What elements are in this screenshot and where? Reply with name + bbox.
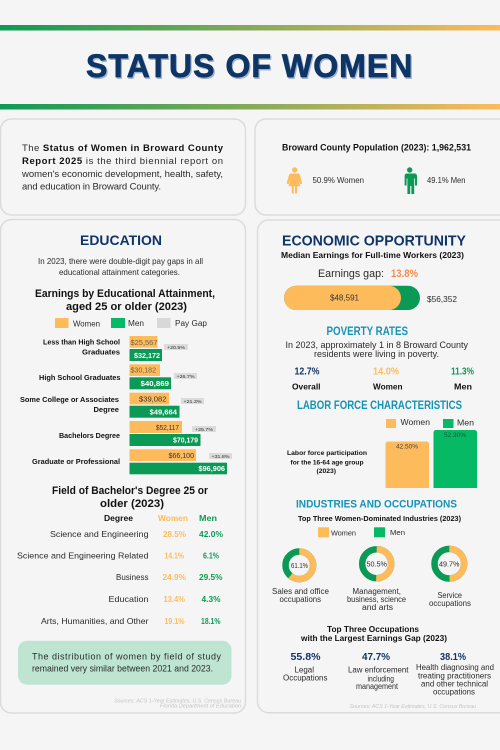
row: less than high school: Graduates xyxy=(82,348,120,356)
stat: law enforcement: 47.7% xyxy=(362,652,390,663)
donut chart: management: Management, xyxy=(352,587,401,596)
stat: health practitioners xyxy=(416,652,494,696)
poverty statistics: 11.3% xyxy=(451,366,474,378)
stat: law enforcement: management xyxy=(356,682,399,691)
table header xyxy=(104,513,217,523)
row: high school graduates: +26.7% xyxy=(176,374,194,379)
donut chart: service: occupations xyxy=(429,599,471,608)
intro text: and education in Broward County. xyxy=(22,182,161,192)
sources: education xyxy=(114,698,241,710)
donut chart: management xyxy=(347,549,407,612)
heading: field of degree: older (2023) xyxy=(100,498,164,510)
stat: legal occupations: Legal xyxy=(294,666,314,674)
subheading: women-dominated industries: Top Three Women-Dominated Industries (2023) xyxy=(298,514,461,523)
stat: health practitioners: 38.1% xyxy=(440,652,466,663)
legend: industries xyxy=(318,527,405,538)
sources: economic opportunity: Sources: ACS 1-Year Estimates, U.S. Census Bureau xyxy=(350,704,476,710)
earnings gap: 13.8% xyxy=(391,268,418,280)
row: graduate or professional xyxy=(32,449,232,474)
donut chart: service xyxy=(429,549,471,608)
table rows xyxy=(17,529,223,626)
row: some college or associates xyxy=(20,393,204,418)
poverty statistics: Women xyxy=(373,382,403,392)
legend: labor force xyxy=(386,418,474,428)
legend: earnings chart: Pay Gap xyxy=(175,319,208,328)
row: graduate or professional: Graduate or Professional xyxy=(32,457,120,466)
legend: industries: Women xyxy=(331,528,356,538)
heading: labor force: LABOR FORCE CHARACTERISTICS xyxy=(297,400,462,412)
intro text: women's economic development, health, safety, xyxy=(21,169,223,180)
row: some college or associates: $39,082 xyxy=(139,394,166,404)
icon: man figure xyxy=(405,167,417,194)
stat: law enforcement: including xyxy=(368,674,394,684)
bar chart: earnings by educational attainment xyxy=(20,336,232,474)
poverty text xyxy=(286,340,468,360)
table rows: 14.1% xyxy=(164,550,184,560)
poverty statistics: Men xyxy=(454,382,472,392)
earnings pill bar: $48,591 xyxy=(330,292,359,302)
title: STATUS OF WOMEN xyxy=(87,49,415,85)
table header: Men xyxy=(199,513,217,523)
table rows: Arts, Humanities, and Other xyxy=(41,616,149,626)
earnings pill bar: $56,352 xyxy=(427,294,457,304)
row: bachelors degree: +25.7% xyxy=(195,427,213,432)
panel: report introduction xyxy=(0,119,246,215)
education summary text xyxy=(38,256,203,277)
table: field of bachelor's degree xyxy=(17,513,223,626)
heading: education: EDUCATION xyxy=(80,232,162,248)
legend: earnings chart: Men xyxy=(128,319,144,328)
table rows: Science and Engineering Related xyxy=(17,550,149,560)
heading: industries and occupations: INDUSTRIES AND OCCUPATIONS xyxy=(296,498,457,510)
stat: health practitioners: Health diagnosing and xyxy=(416,663,494,672)
intro text xyxy=(21,143,224,192)
poverty text: In 2023, approximately 1 in 8 Broward County xyxy=(286,340,468,351)
poverty text: residents were living in poverty. xyxy=(314,349,439,360)
table rows: 24.9% xyxy=(162,572,186,582)
panel: economic opportunity xyxy=(258,220,500,713)
subheading: median earnings: Median Earnings for Full-time Workers (2023) xyxy=(281,250,464,260)
row: less than high school: +20.5% xyxy=(167,345,185,350)
stat: health practitioners: occupations xyxy=(433,688,475,696)
earnings gap: Earnings gap: xyxy=(318,268,384,280)
heading: field of degree xyxy=(52,485,209,510)
poverty statistics: 12.7% xyxy=(294,366,320,378)
legend: earnings chart: Women xyxy=(73,320,100,328)
row: high school graduates: High School Graduates xyxy=(39,373,120,382)
table rows: Science and Engineering xyxy=(50,529,149,539)
callout: distribution note: The distribution of women by field of study xyxy=(32,652,222,662)
row: high school graduates: $40,869 xyxy=(140,379,169,388)
heading: field of degree: Field of Bachelor's Degree 25 or xyxy=(52,485,209,497)
subheading: largest earnings gap: Top Three Occupations xyxy=(327,624,419,634)
education summary text: educational attainment categories. xyxy=(59,267,180,277)
heading: economic opportunity: ECONOMIC OPPORTUNITY xyxy=(282,234,466,250)
row: bachelors degree xyxy=(59,421,216,446)
heading: earnings by attainment: aged 25 or older (2023) xyxy=(66,301,187,313)
row: some college or associates: $49,664 xyxy=(150,408,178,416)
row: some college or associates: Some College or Associates xyxy=(20,395,119,404)
bar chart: labor force participation: 42.50% xyxy=(396,444,418,450)
row: less than high school: $32,172 xyxy=(134,351,160,360)
legend: labor force: Women xyxy=(400,418,430,427)
poverty statistics: 14.0% xyxy=(373,366,399,378)
intro text: Report 2025 is the third biennial report on xyxy=(22,156,223,167)
table rows: 18.1% xyxy=(201,616,221,626)
labor force label: Labor force participation xyxy=(287,450,367,457)
population heading: Broward County Population (2023): 1,962,531 xyxy=(282,142,472,154)
sources: education: Florida Department of Education xyxy=(160,704,241,710)
row: some college or associates: Degree xyxy=(94,405,119,414)
row: graduate or professional: $66,100 xyxy=(168,451,194,460)
title: STATUS OF WOMEN xyxy=(86,48,413,84)
women share: 50.9% Women xyxy=(312,176,364,185)
panel: county population xyxy=(255,119,500,215)
row: bachelors degree: $70,179 xyxy=(173,436,198,444)
icon: woman figure xyxy=(287,167,302,194)
row: less than high school xyxy=(43,336,188,361)
education summary text: In 2023, there were double-digit pay gaps in all xyxy=(38,256,203,266)
table rows: 29.5% xyxy=(199,572,223,582)
row: high school graduates: $30,182 xyxy=(130,366,156,374)
heading: earnings by attainment xyxy=(35,288,215,313)
row: high school graduates xyxy=(39,364,197,389)
legend: industries: Men xyxy=(390,528,405,537)
sources: education: Sources: ACS 1-Year Estimates, U.S. Census Bureau xyxy=(114,698,241,704)
row: some college or associates: +21.3% xyxy=(184,399,202,404)
bar chart: labor force participation: 52.30% xyxy=(444,432,466,439)
donut chart: service: 49.7% xyxy=(439,560,460,568)
donut chart: sales and office: 61.1% xyxy=(291,561,308,570)
donut chart: service: Service xyxy=(438,591,462,600)
labor force label: for the 16-64 age group xyxy=(290,460,364,466)
donut chart: sales and office xyxy=(272,552,330,604)
table header: Women xyxy=(158,513,188,523)
donut chart: management: 50.5% xyxy=(366,560,387,568)
donut chart: sales and office: occupations xyxy=(280,595,321,604)
table header: Degree xyxy=(104,513,133,523)
heading: earnings by attainment: Earnings by Educational Attainment, xyxy=(35,288,215,300)
legend: earnings chart xyxy=(55,318,208,328)
men share: 49.1% Men xyxy=(427,176,466,185)
donut chart: management: and arts xyxy=(362,603,393,612)
row: graduate or professional: +31.8% xyxy=(212,454,230,459)
poverty statistics: Overall xyxy=(292,382,320,392)
table rows: 42.0% xyxy=(199,529,223,539)
donut chart: management: business, science xyxy=(347,595,407,604)
stat: legal occupations: Occupations xyxy=(283,674,328,682)
stat: health practitioners: treating practitioners xyxy=(418,672,491,680)
stat: law enforcement xyxy=(348,652,409,691)
row: bachelors degree: Bachelors Degree xyxy=(59,431,120,440)
heading: poverty rates: POVERTY RATES xyxy=(326,326,408,338)
table rows: 4.3% xyxy=(202,594,221,604)
earnings gap xyxy=(318,268,418,280)
donut chart: sales and office: Sales and office xyxy=(272,587,330,596)
table rows: 28.5% xyxy=(163,529,186,539)
row: less than high school: Less than High School xyxy=(43,338,120,346)
stat: law enforcement: Law enforcement xyxy=(348,666,409,674)
subheading: largest earnings gap xyxy=(300,624,447,643)
table rows: Education xyxy=(108,594,149,604)
poverty statistics xyxy=(292,366,474,392)
table rows: 19.1% xyxy=(164,616,185,626)
stat: legal occupations xyxy=(283,652,328,682)
table rows: Business xyxy=(116,572,148,582)
labor force label: (2023) xyxy=(316,468,336,475)
subheading: largest earnings gap: with the Largest Earnings Gap (2023) xyxy=(300,633,447,643)
row: graduate or professional: $96,906 xyxy=(198,464,225,473)
callout: distribution note: remained very similar between 2021 and 2023. xyxy=(32,664,213,674)
bar chart: labor force participation xyxy=(386,430,477,488)
callout: distribution note xyxy=(18,641,232,685)
row: bachelors degree: $52,117 xyxy=(156,423,179,432)
table rows: 6.1% xyxy=(203,550,219,560)
panel: education xyxy=(0,220,246,713)
labor force label xyxy=(287,450,367,475)
stat: health practitioners: and other technical xyxy=(421,680,488,688)
intro text: The Status of Women in Broward County xyxy=(22,143,224,154)
row: less than high school: $25,567 xyxy=(130,338,158,347)
earnings pill bar xyxy=(284,286,457,310)
table rows: 13.4% xyxy=(164,594,185,604)
stat: legal occupations: 55.8% xyxy=(290,652,321,663)
legend: labor force: Men xyxy=(457,418,474,428)
